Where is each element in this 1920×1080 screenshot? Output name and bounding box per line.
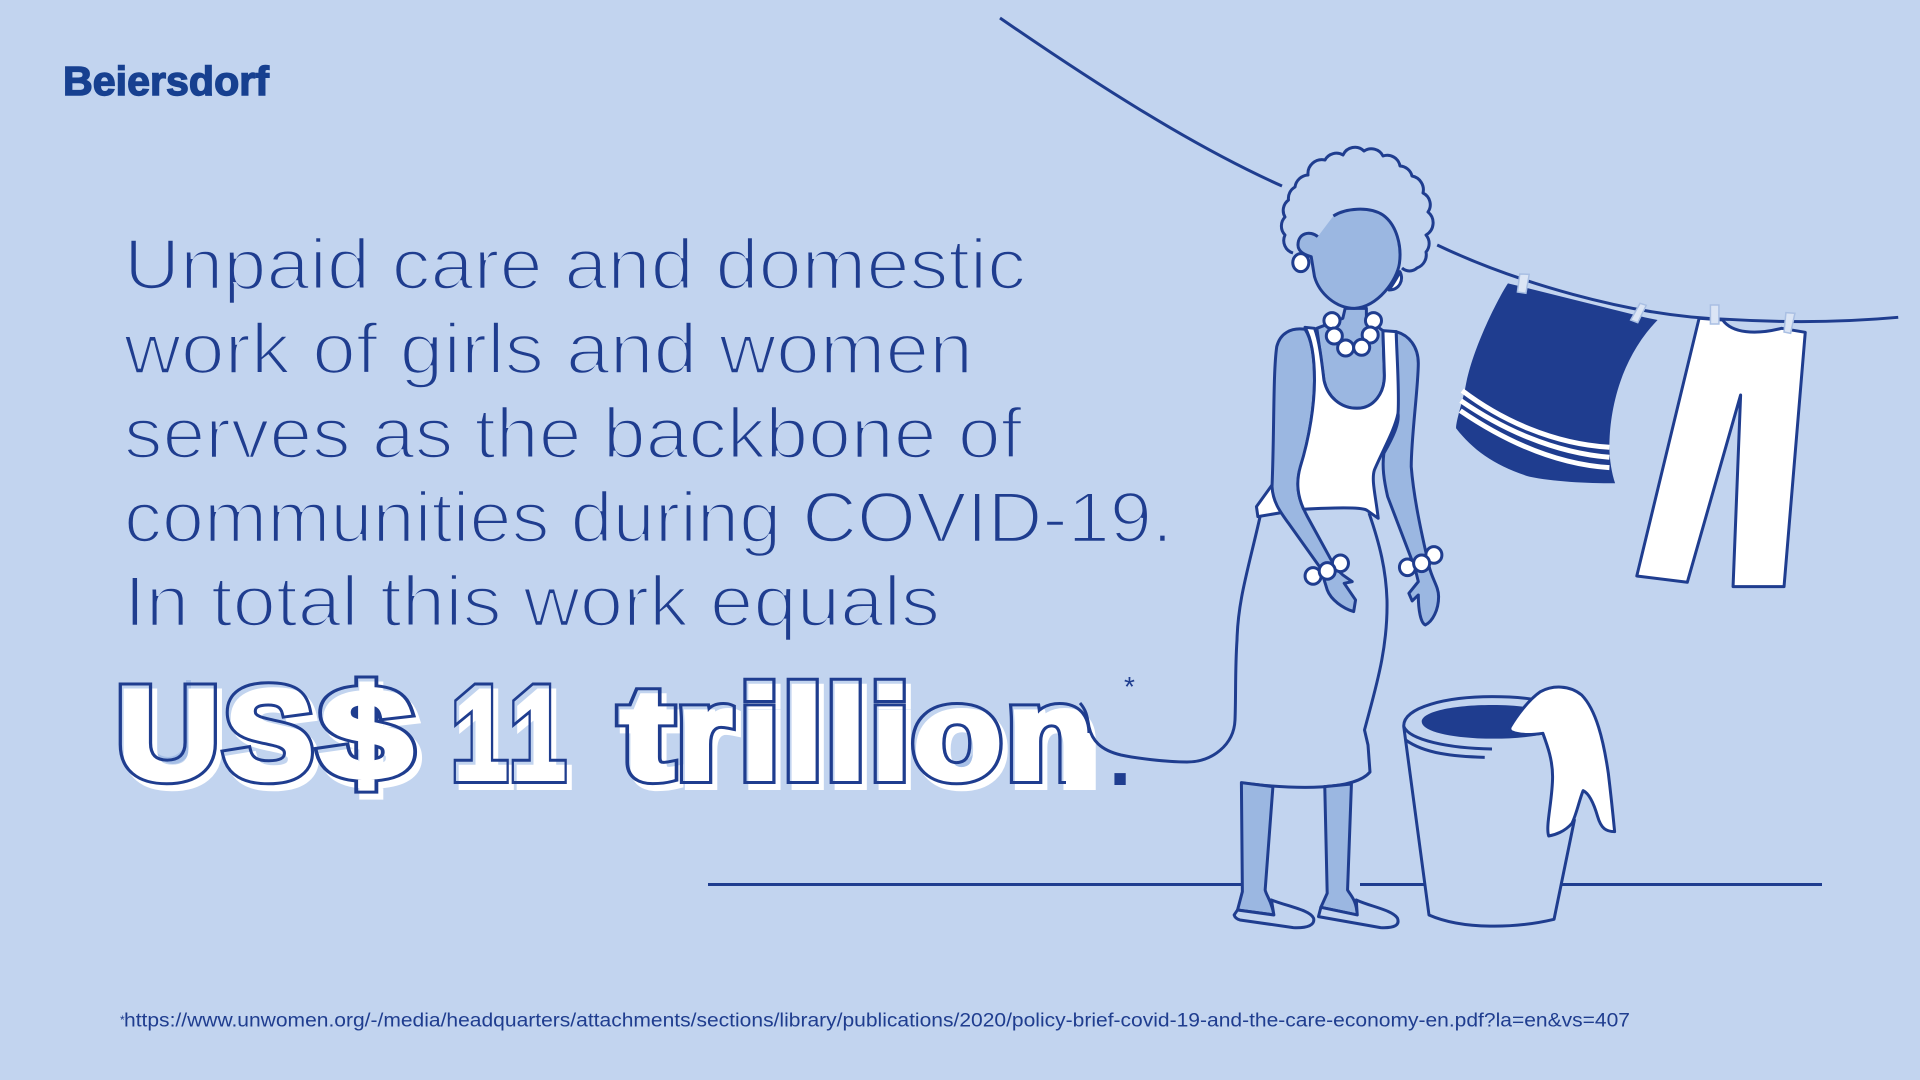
asterisk: * [1124, 671, 1135, 702]
big figure: US$ 11 trillion: n [1012, 666, 1098, 812]
cloth [1510, 687, 1615, 836]
bucket body [1404, 697, 1574, 926]
necklace [1324, 313, 1382, 356]
headline text block [123, 226, 1173, 642]
tank top [1298, 327, 1398, 518]
headline text block: Unpaid care and domestic [124, 226, 1026, 305]
big figure: US$ 11 trillion: i [875, 666, 914, 812]
earrings [1293, 254, 1309, 272]
towel on line [1456, 283, 1658, 483]
bucket rim lines [1404, 727, 1492, 757]
bracelets [1305, 547, 1442, 584]
tank top back hem [1256, 485, 1281, 517]
bucket opening [1422, 705, 1540, 739]
big figure: US$ 11 trillion: l [831, 666, 870, 812]
headline text block: work of girls and women [123, 310, 973, 390]
arms [1272, 329, 1356, 612]
upper body [1256, 209, 1442, 625]
headline text block: communities during COVID-19. [124, 479, 1173, 558]
ground line [708, 883, 1822, 886]
big figure: US$ 11 trillion: i [745, 666, 784, 812]
legs [1234, 783, 1398, 928]
skirt and trailing line into the figure [1080, 513, 1387, 787]
big figure: US$ 11 trillion: U [122, 666, 224, 812]
hair [1281, 147, 1433, 271]
big figure: US$ 11 trillion: 1 [457, 666, 512, 812]
footnote source URL: * [120, 1013, 125, 1027]
big figure: US$ 11 trillion [118, 676, 1096, 800]
woman figure [1080, 147, 1442, 928]
clothes pegs [1517, 274, 1795, 333]
big figure: US$ 11 trillion: o [917, 666, 1007, 812]
footnote source URL: https://www.unwomen.org/-/media/headquarters/attachments/sections/library/publications/2020/policy-brief-covid-19-and-the-care-economy-en.pdf?la=en&vs=407 [124, 1010, 1630, 1032]
big figure: US$ 11 trillion: t [625, 666, 678, 812]
big figure: US$ 11 trillion: l [788, 666, 827, 812]
logo: Beiersdorf: Beiersdorf [63, 58, 269, 104]
big figure: US$ 11 trillion: S [229, 666, 318, 812]
neck and chest [1317, 308, 1384, 408]
face and ear [1298, 209, 1400, 308]
big figure: US$ 11 trillion: $ [325, 666, 417, 812]
washing line [1000, 18, 1898, 322]
laundry bucket with cloth [1404, 687, 1615, 926]
headline text block: In total this work equals [124, 563, 940, 642]
trousers on line [1637, 318, 1805, 587]
full stop after figure: . [1109, 713, 1131, 802]
headline text block: serves as the backbone of [124, 395, 1022, 474]
big figure: US$ 11 trillion: 1 [515, 666, 570, 812]
big figure: US$ 11 trillion: r [682, 666, 736, 812]
